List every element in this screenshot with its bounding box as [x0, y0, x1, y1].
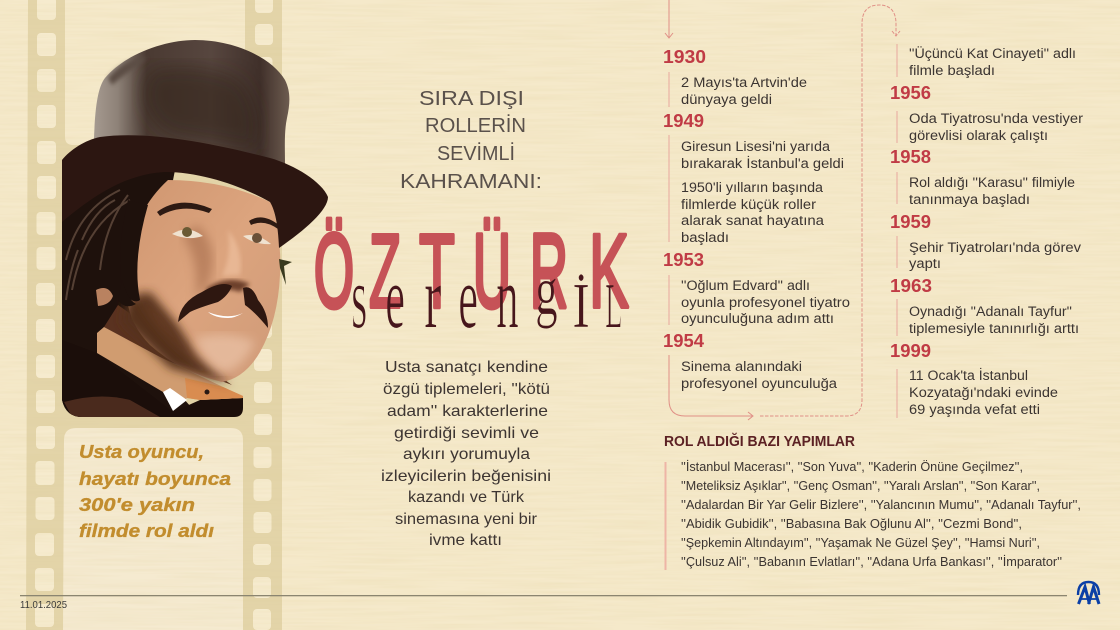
- mouth: [208, 312, 243, 318]
- productions list: ''Abidik Gubidik'', ''Babasına Bak Oğlunu Al'', ''Cezmi Bond'',: [681, 517, 1022, 531]
- name: ÖZTÜRK: R: [530, 212, 568, 330]
- name: ÖZTÜRK: Z: [369, 212, 401, 330]
- timeline column 1: 1930: [663, 46, 706, 67]
- timeline column 1: oyunla profesyonel tiyatro: [681, 295, 850, 310]
- name: ÖZTÜRK: Ö: [314, 212, 354, 330]
- eyebrows: [157, 203, 212, 216]
- name: ÖZTÜRK: T: [419, 213, 455, 330]
- name: Serengil: İ: [572, 270, 590, 341]
- film frame: lower caption panel: [63, 428, 243, 630]
- callout: 300 films: Usta oyuncu,: [79, 442, 204, 462]
- productions list: ''Meteliksiz Aşıklar'', ''Genç Osman'', ''Yaralı Arslan'', ''Son Karar'',: [681, 479, 1040, 493]
- timeline column 2: 11 Ocak'ta İstanbul: [909, 368, 1028, 383]
- name: Serengil: e: [458, 250, 478, 347]
- timeline column 2: 1958: [890, 146, 931, 167]
- timeline column 2: tanınmaya başladı: [909, 192, 1030, 207]
- center heading: SEVİMLİ: [437, 142, 515, 165]
- timeline column 1: 2 Mayıs'ta Artvin'de: [681, 75, 807, 90]
- timeline column 2: 69 yaşında vefat etti: [909, 402, 1040, 417]
- name: Serengil: L: [605, 270, 623, 341]
- productions list: ''İstanbul Macerası'', ''Son Yuva'', ''Kaderin Önüne Geçilmez'',: [681, 460, 1023, 474]
- timeline column 2: Kozyatağı'ndaki evinde: [909, 385, 1058, 400]
- hair and dark backdrop: [62, 170, 200, 417]
- callout: 300 films: [79, 442, 231, 541]
- timeline column 1: 1950'li yılların başında: [681, 180, 824, 195]
- name: ÖZTÜRK: Ü: [473, 212, 511, 330]
- moustache: [178, 284, 232, 322]
- timeline column 2: Oda Tiyatrosu'nda vestiyer: [909, 111, 1084, 126]
- center paragraph: ivme kattı: [429, 532, 502, 549]
- timeline column 2: 1959: [890, 211, 931, 232]
- timeline column 2: 1999: [890, 340, 931, 361]
- productions list: [664, 460, 1081, 570]
- leaf detail: [279, 259, 292, 285]
- name: Serengil: n: [496, 250, 519, 347]
- timeline column 1: başladı: [681, 230, 729, 245]
- center paragraph: aykırı yorumuyla: [403, 446, 530, 463]
- timeline column 2: Rol aldığı ''Karasu'' filmiyle: [909, 175, 1075, 190]
- hat brim: [62, 135, 328, 248]
- timeline column 1: alarak sanat hayatına: [681, 213, 825, 228]
- productions list: ''Adalardan Bir Yar Gelir Bizlere'', ''Yalancının Mumu'', ''Adanalı Tayfur'',: [681, 498, 1081, 512]
- productions list: ''Şepkemin Altındayım'', ''Yaşamak Ne Güzel Şey'', ''Hamsi Nuri'',: [681, 536, 1040, 550]
- timeline column 1: 1953: [663, 249, 704, 270]
- center paragraph: izleyicilerin beğenisini: [381, 468, 551, 485]
- timeline column 1: bırakarak İstanbul'a geldi: [681, 156, 844, 171]
- name: Serengil: e: [385, 250, 405, 347]
- timeline column 2: filmle başladı: [909, 63, 995, 78]
- name: ÖZTÜRK: K: [589, 214, 629, 330]
- timeline column 2: yaptı: [909, 256, 941, 271]
- timeline column 2: 1956: [890, 82, 931, 103]
- timeline column 1: profesyonel oyunculuğa: [681, 376, 838, 391]
- name: Serengil: [351, 248, 623, 347]
- name: ÖZTÜRK: [314, 212, 629, 330]
- film strip: [26, 0, 282, 630]
- timeline column 1: ''Oğlum Edvard'' adlı: [681, 278, 810, 293]
- collar: [97, 327, 243, 401]
- timeline column 1: filmlerde küçük roller: [681, 197, 817, 212]
- center paragraph: [381, 359, 551, 549]
- center paragraph: sinemasına yeni bir: [395, 511, 538, 528]
- timeline column 1: Sinema alanındaki: [681, 359, 802, 374]
- timeline column 1: [663, 46, 850, 391]
- center paragraph: adam'' karakterlerine: [387, 403, 548, 420]
- name: Serengil: g: [535, 253, 558, 329]
- footer rule: [20, 595, 1067, 596]
- center heading: KAHRAMANI:: [400, 171, 542, 193]
- portrait illustration: [62, 40, 328, 417]
- timeline column 2: görevlisi olarak çalıştı: [909, 128, 1048, 143]
- stubble and jaw shading: [122, 292, 230, 384]
- callout: 300 films: hayatı boyunca: [79, 469, 231, 489]
- ear: [96, 288, 113, 306]
- center paragraph: özgü tiplemeleri, ''kötü: [383, 381, 550, 398]
- timeline column 2: ''Üçüncü Kat Cinayeti'' adlı: [909, 46, 1076, 61]
- center heading: SIRA DIŞI: [419, 88, 524, 110]
- sideburn: [126, 200, 148, 302]
- callout: 300 films: filmde rol aldı: [79, 521, 214, 541]
- timeline column 1: 1954: [663, 330, 705, 351]
- center heading: [400, 88, 542, 193]
- callout: 300 films: 300'e yakın: [79, 495, 195, 515]
- timeline column 1: dünyaya geldi: [681, 92, 772, 107]
- center heading: ROLLERİN: [425, 114, 526, 137]
- hair highlights: [66, 190, 130, 300]
- timeline column 1: Giresun Lisesi'ni yarıda: [681, 139, 831, 154]
- productions heading: ROL ALDIĞI BAZI YAPIMLAR: [664, 432, 855, 450]
- center paragraph: kazandı ve Türk: [408, 489, 525, 506]
- timeline column 2: Şehir Tiyatroları'nda görev: [909, 240, 1081, 255]
- timeline column 1: 1949: [663, 110, 704, 131]
- eyes: [172, 229, 203, 238]
- name: Serengil: r: [424, 248, 442, 346]
- timeline connector arrows: [665, 0, 900, 420]
- timeline column 2: [890, 46, 1084, 417]
- name: Serengil: s: [351, 248, 367, 346]
- date: 11.01.2025: [20, 599, 67, 611]
- hat crown: [94, 40, 289, 165]
- timeline column 2: 1963: [890, 275, 932, 296]
- center paragraph: getirdiği sevimli ve: [394, 425, 539, 442]
- film frame: top: [65, 0, 245, 160]
- center paragraph: Usta sanatçı kendine: [385, 359, 548, 376]
- timeline column 1: oyunculuğuna adım attı: [681, 311, 834, 326]
- face: [126, 180, 280, 382]
- jacket: [62, 398, 243, 417]
- productions list: ''Çulsuz Ali'', ''Babanın Evlatları'', ''Adana Urfa Bankası'', ''İmparator'': [681, 555, 1062, 569]
- timeline column 2: tiplemesiyle tanınırlığı arttı: [909, 321, 1079, 336]
- neck shadow: [104, 305, 232, 385]
- icon: AA logo: [1078, 582, 1099, 604]
- timeline column 2: Oynadığı ''Adanalı Tayfur'': [909, 304, 1072, 319]
- nose: [205, 280, 250, 295]
